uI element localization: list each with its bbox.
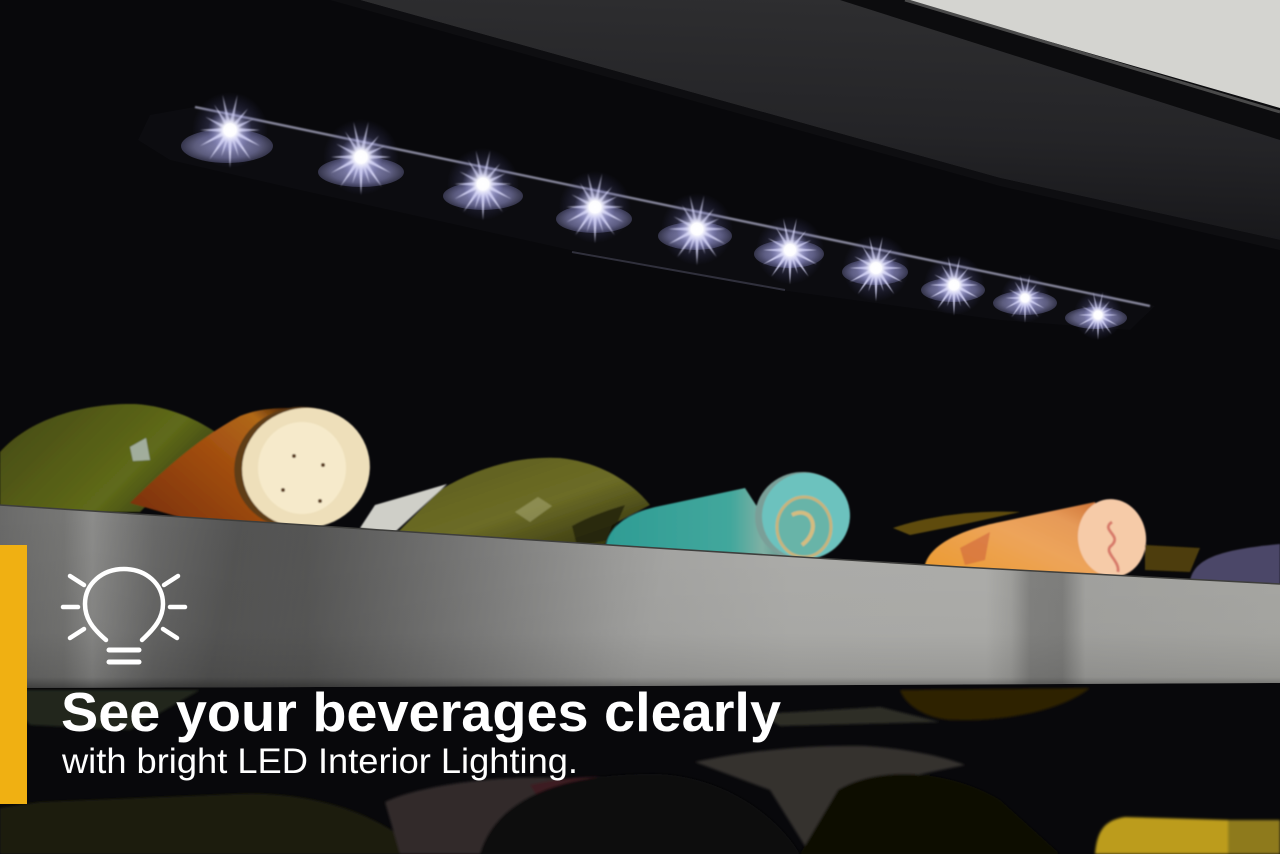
accent bar [0, 545, 27, 804]
bottle: orange cap [925, 495, 1151, 581]
LED light strip [138, 92, 1155, 340]
bottle: teal cap [606, 466, 856, 566]
stainless steel shelf [0, 505, 1280, 688]
bottle: amber neck with cream cap [130, 395, 379, 541]
upper shelf bottles [0, 395, 1280, 585]
dark bottle behind orange cap [893, 512, 1020, 535]
bottle: olive green left [0, 404, 218, 512]
cabinet ceiling trim [330, 0, 1280, 250]
subheading: with bright LED Interior Lighting. [61, 742, 578, 781]
strip housing [138, 106, 1155, 330]
lens discs [181, 129, 1127, 329]
bottle: purple cap [1190, 544, 1280, 585]
bottle: dark yellow behind right [1145, 545, 1200, 572]
LED starbursts [192, 92, 1123, 340]
lower shelf bottles, dimmed [0, 688, 1280, 854]
heading: See your beverages clearly [61, 681, 781, 743]
icon: light bulb [63, 569, 185, 662]
bottle: olive green centre [360, 458, 650, 546]
strip highlight edge [195, 107, 1150, 306]
strip lower edge [572, 252, 785, 290]
